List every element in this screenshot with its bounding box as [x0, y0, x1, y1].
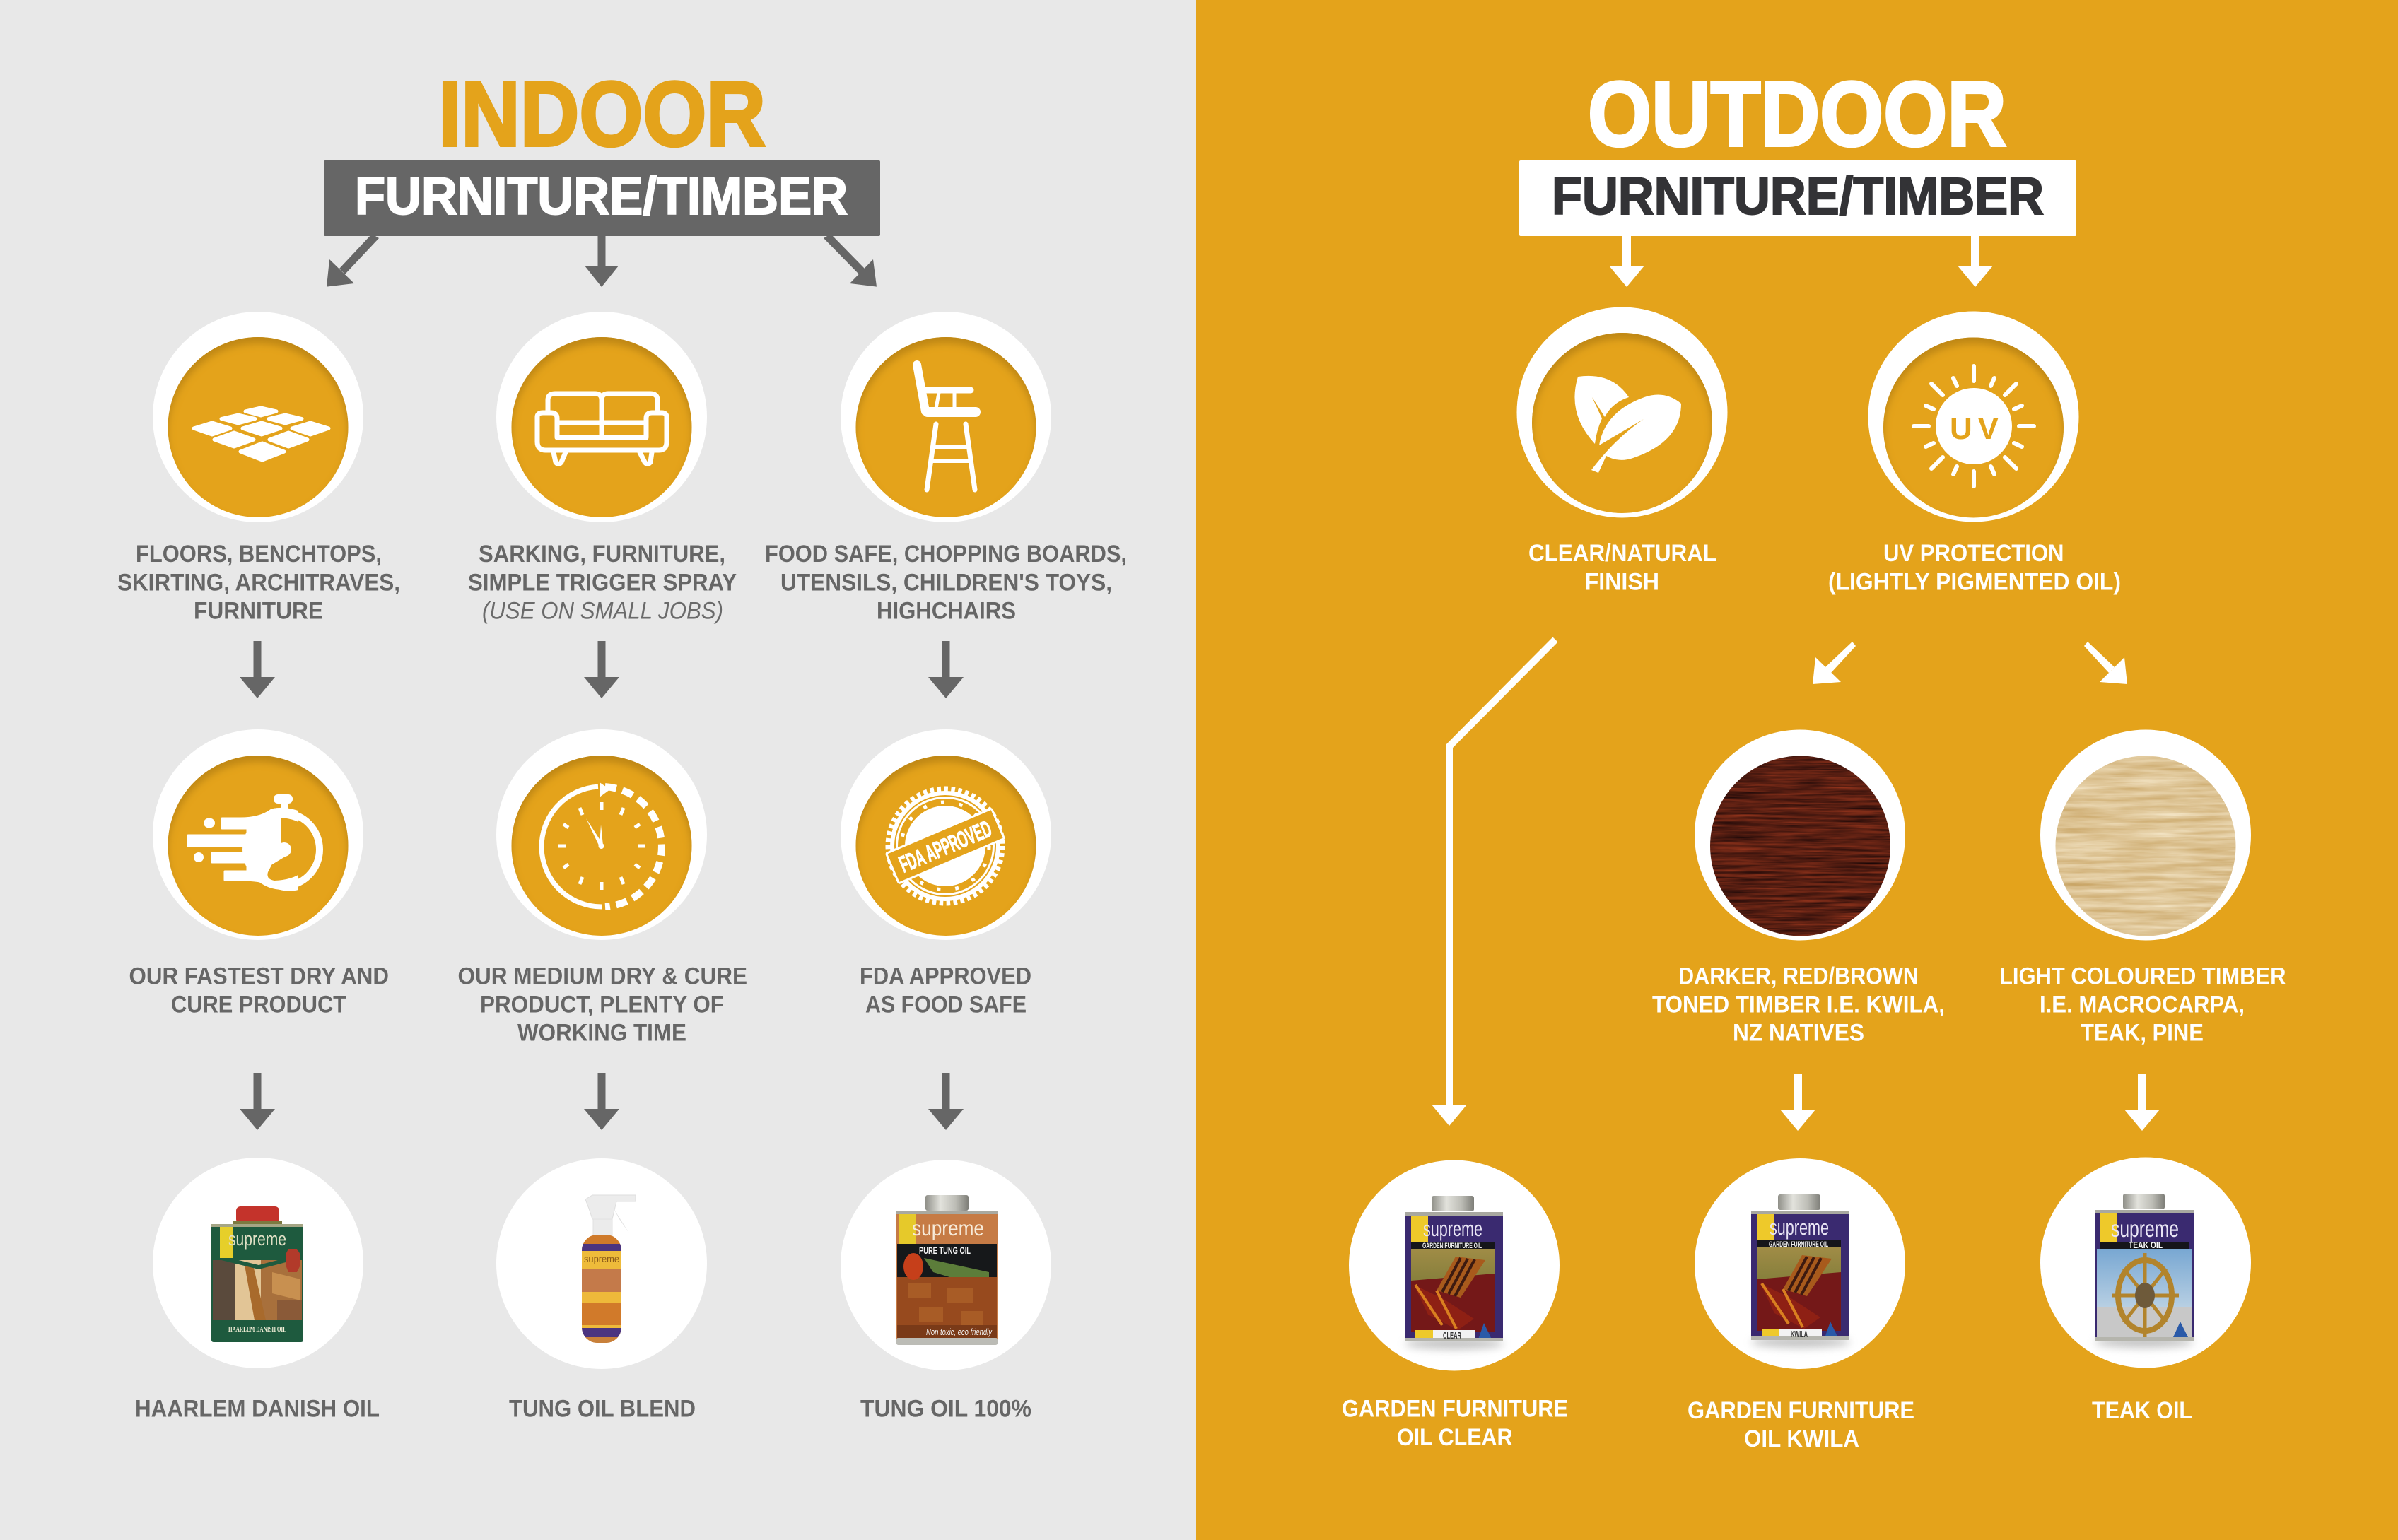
label: food safe: HIGHCHAIRS [877, 598, 1016, 625]
label: Teak Oil: TEAK OIL [2092, 1397, 2192, 1424]
panel: outdoor [1196, 0, 2398, 1540]
arrow: heading to furniture [585, 236, 619, 287]
arrow: clear finish long connector [1432, 640, 1555, 1126]
arrow: heading to clear finish [1609, 236, 1644, 287]
label: sarking: (USE ON SMALL JOBS) [482, 598, 723, 625]
product: Garden Furniture Oil Clear [1349, 1160, 1560, 1371]
label: Haarlem Danish Oil: HAARLEM DANISH OIL [135, 1396, 380, 1423]
label: medium dry: OUR MEDIUM DRY & CURE [458, 963, 747, 990]
label: food safe [765, 541, 1127, 625]
arrow: light timber down [2124, 1074, 2160, 1131]
arrow: UV to dark timber [1813, 642, 1856, 684]
label: food safe: FOOD SAFE, CHOPPING BOARDS, [765, 541, 1127, 568]
product: Garden Furniture Oil Kwila: supreme [1770, 1215, 1829, 1240]
label: FDA approved: FDA APPROVED [860, 963, 1031, 990]
product: Garden Furniture Oil Clear: supreme [1423, 1216, 1482, 1241]
label: darker timber: DARKER, RED/BROWN [1678, 963, 1919, 990]
label: fastest dry [129, 963, 389, 1018]
label: floors: SKIRTING, ARCHITRAVES, [117, 570, 400, 596]
label: Garden Furniture Oil Kwila: OIL KWILA [1744, 1426, 1859, 1452]
heading: outdoor furniture/timber: FURNITURE/TIMBER [1552, 167, 2044, 225]
product: Teak Oil: TEAK OIL [2129, 1240, 2163, 1250]
label: sarking: SIMPLE TRIGGER SPRAY [468, 570, 737, 596]
product: Teak Oil [2040, 1158, 2251, 1368]
icon circle: FDA approved stamp: FDA APPROVED [895, 815, 995, 877]
label: darker timber: NZ NATIVES [1733, 1020, 1864, 1047]
arrow: heading to floors [327, 234, 379, 287]
label: Tung Oil Blend: TUNG OIL BLEND [509, 1396, 696, 1423]
label: medium dry: PRODUCT, PLENTY OF [480, 992, 724, 1018]
swatch: dark red-brown timber [1695, 729, 1905, 940]
arrow: floors down [240, 641, 275, 698]
icon circle: UV sun: UV [1950, 411, 1999, 446]
label: clear natural finish: CLEAR/NATURAL [1528, 540, 1716, 567]
title: indoor: INDOOR [438, 62, 766, 165]
label: sarking [468, 541, 737, 625]
panel: indoor [117, 80, 1125, 1417]
label: UV protection [1828, 540, 2121, 596]
outdoor background [1196, 0, 2398, 1540]
label: Garden Furniture Oil Kwila [1688, 1397, 1914, 1452]
product: Tung Oil 100% [841, 1160, 1051, 1370]
arrow: heading to food safe [824, 234, 877, 287]
icon circle: clock [496, 729, 707, 940]
arrow: fastest down [240, 1073, 275, 1130]
product: Garden Furniture Oil Clear: GARDEN FURNITURE OIL [1422, 1242, 1482, 1250]
arrow: dark timber down [1780, 1074, 1815, 1131]
arrow: FDA down [928, 1073, 964, 1130]
indoor background [0, 0, 1196, 1540]
product: Tung Oil 100%: Non toxic, eco friendly [926, 1327, 993, 1337]
product: Haarlem Danish Oil [153, 1158, 363, 1368]
product: Haarlem Danish Oil: HAARLEM DANISH OIL [228, 1325, 286, 1334]
label: medium dry: WORKING TIME [517, 1020, 686, 1047]
label: clear natural finish: FINISH [1585, 569, 1659, 596]
label: Garden Furniture Oil Clear: OIL CLEAR [1397, 1424, 1513, 1451]
label: darker timber [1652, 963, 1945, 1047]
label: food safe: UTENSILS, CHILDREN'S TOYS, [780, 570, 1112, 596]
product: Tung Oil Blend spray [496, 1158, 707, 1369]
arrow: medium down [584, 1073, 619, 1130]
arrow: sarking down [584, 641, 619, 698]
label: light timber: LIGHT COLOURED TIMBER [1999, 963, 2286, 990]
label: FDA approved [860, 963, 1031, 1018]
product: Tung Oil Blend spray: supreme [584, 1253, 619, 1264]
label: fastest dry: OUR FASTEST DRY AND [129, 963, 389, 990]
product: Teak Oil: supreme [2111, 1216, 2179, 1242]
product: Tung Oil 100%: supreme [912, 1217, 984, 1240]
label: darker timber: TONED TIMBER I.E. KWILA, [1652, 992, 1945, 1018]
arrow: UV to light timber [2084, 642, 2127, 684]
label: light timber: I.E. MACROCARPA, [2040, 992, 2245, 1018]
label: Garden Furniture Oil Kwila: GARDEN FURNITURE [1688, 1397, 1914, 1424]
arrow: heading to UV protection [1958, 236, 1993, 287]
swatch: light timber [2040, 729, 2251, 940]
label: medium dry [458, 963, 747, 1047]
product: Garden Furniture Oil Clear: CLEAR [1443, 1330, 1461, 1341]
icon circle: FDA approved stamp [841, 729, 1051, 940]
icon circle: sofa [496, 312, 707, 522]
product: Haarlem Danish Oil: supreme [228, 1228, 286, 1250]
label: UV protection: UV PROTECTION [1883, 540, 2064, 567]
arrow: food safe down [928, 641, 964, 698]
label: FDA approved: AS FOOD SAFE [865, 992, 1027, 1018]
label: clear natural finish [1528, 540, 1716, 596]
label: light timber [1999, 963, 2286, 1047]
label: sarking: SARKING, FURNITURE, [479, 541, 725, 568]
heading: indoor furniture/timber: FURNITURE/TIMBER [355, 167, 848, 225]
icon circle: leaves [1517, 307, 1728, 517]
label: floors: FLOORS, BENCHTOPS, [136, 541, 382, 568]
label: Garden Furniture Oil Clear [1342, 1396, 1568, 1451]
icon circle: floor tiles [153, 312, 363, 522]
product: Garden Furniture Oil Kwila: GARDEN FURNITURE OIL [1769, 1240, 1828, 1249]
label: fastest dry: CURE PRODUCT [171, 992, 346, 1018]
product: Tung Oil 100%: PURE TUNG OIL [919, 1245, 971, 1256]
label: floors [117, 541, 400, 625]
title: outdoor: OUTDOOR [1588, 62, 2006, 165]
label: UV protection: (LIGHTLY PIGMENTED OIL) [1828, 569, 2121, 596]
label: floors: FURNITURE [194, 598, 323, 625]
product: Garden Furniture Oil Kwila [1695, 1158, 1905, 1369]
label: Tung Oil 100%: TUNG OIL 100% [860, 1396, 1031, 1423]
label: Garden Furniture Oil Clear: GARDEN FURNITURE [1342, 1396, 1568, 1423]
icon circle: UV sun [1868, 311, 2078, 522]
icon circle: highchair [841, 312, 1051, 522]
product: Garden Furniture Oil Kwila: KWILA [1791, 1329, 1808, 1339]
icon circle: stopwatch [153, 729, 363, 940]
label: light timber: TEAK, PINE [2081, 1020, 2204, 1047]
